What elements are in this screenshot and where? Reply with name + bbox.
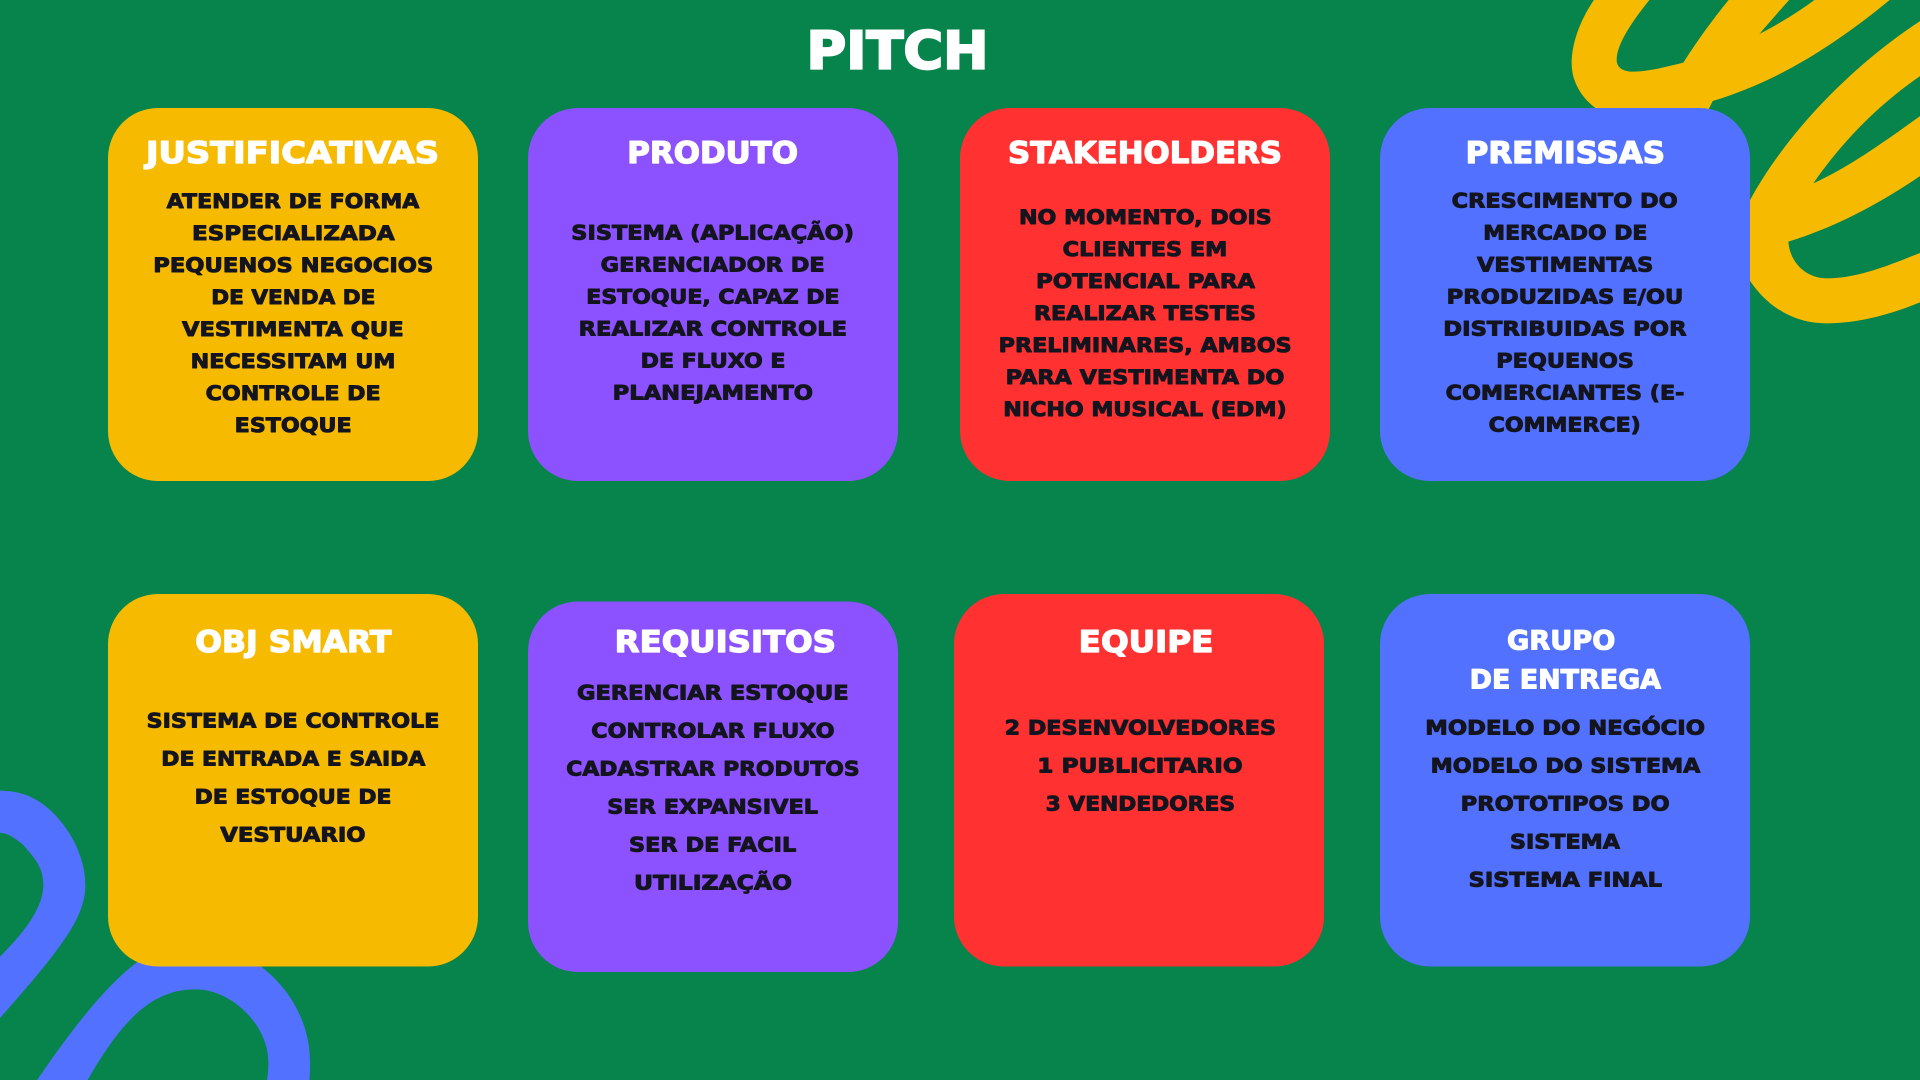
heading: grupo de entrega: GRUPO — [1507, 625, 1615, 656]
text block: premissas — [1443, 189, 1687, 437]
text block: justificativas: ESTOQUE — [235, 413, 352, 437]
heading: justificativas: JUSTIFICATIVAS — [144, 136, 439, 171]
text block: premissas: COMERCIANTES (E- — [1446, 381, 1684, 405]
text block: produto: SISTEMA (APLICAÇÃO) — [571, 220, 854, 244]
text block: justificativas: DE VENDA DE — [211, 285, 375, 309]
decorative yellow scribble, top right — [1572, 0, 1920, 323]
panel: obj smart — [108, 594, 478, 966]
text block: requisitos: SER DE FACIL — [629, 832, 797, 856]
text block: obj smart: VESTUARIO — [220, 823, 366, 847]
panel: grupo de entrega — [1380, 594, 1750, 966]
text block: requisitos: CADASTRAR PRODUTOS — [566, 756, 860, 780]
text block: obj smart: DE ESTOQUE DE — [195, 785, 391, 809]
text block: premissas: PRODUZIDAS E/OU — [1447, 285, 1683, 309]
text block: obj smart — [147, 709, 439, 847]
panel: equipe — [954, 594, 1324, 966]
text block: requisitos: UTILIZAÇÃO — [634, 870, 792, 894]
heading: obj smart: OBJ SMART — [195, 625, 392, 660]
text block: grupo de entrega: SISTEMA FINAL — [1469, 867, 1662, 891]
text block: justificativas: ATENDER DE FORMA — [167, 189, 420, 213]
text block: obj smart: SISTEMA DE CONTROLE — [147, 709, 439, 733]
decorative blue scribble, bottom left — [0, 791, 310, 1080]
text block: requisitos: SER EXPANSIVEL — [607, 794, 818, 818]
text block: stakeholders: PRELIMINARES, AMBOS — [999, 333, 1292, 357]
panel: justificativas — [108, 108, 478, 481]
panel: premissas — [1380, 108, 1750, 481]
text block: equipe: 2 DESENVOLVEDORES — [1005, 715, 1276, 739]
text block: stakeholders: REALIZAR TESTES — [1034, 301, 1256, 325]
text block: produto: PLANEJAMENTO — [613, 380, 813, 404]
heading: equipe: EQUIPE — [1079, 625, 1213, 660]
text block: grupo de entrega: SISTEMA — [1510, 829, 1621, 853]
text block: stakeholders: CLIENTES EM — [1063, 237, 1227, 261]
heading: requisitos: REQUISITOS — [615, 625, 836, 660]
text block: justificativas: PEQUENOS NEGOCIOS — [153, 253, 433, 277]
text block: premissas: VESTIMENTAS — [1477, 253, 1653, 277]
text block: stakeholders: NICHO MUSICAL (EDM) — [1003, 397, 1287, 421]
title: PITCH — [806, 22, 988, 82]
text block: requisitos: CONTROLAR FLUXO — [591, 718, 835, 742]
text block: grupo de entrega — [1425, 715, 1705, 891]
text block: requisitos — [566, 680, 860, 894]
heading: produto: PRODUTO — [627, 136, 798, 171]
text block: equipe: 3 VENDEDORES — [1046, 791, 1235, 815]
text block: justificativas: NECESSITAM UM — [191, 349, 395, 373]
text block: justificativas: VESTIMENTA QUE — [182, 317, 404, 341]
text block: obj smart: DE ENTRADA E SAIDA — [161, 747, 426, 771]
text block: premissas: CRESCIMENTO DO — [1452, 189, 1678, 213]
text block: produto — [571, 220, 854, 404]
panel: produto — [528, 108, 898, 481]
heading: premissas: PREMISSAS — [1466, 136, 1665, 171]
text block: stakeholders: PARA VESTIMENTA DO — [1006, 365, 1284, 389]
heading: grupo de entrega: DE ENTREGA — [1470, 665, 1661, 696]
text block: produto: DE FLUXO E — [641, 348, 785, 372]
text block: stakeholders — [999, 205, 1292, 421]
text block: grupo de entrega: MODELO DO NEGÓCIO — [1425, 715, 1705, 739]
text block: grupo de entrega: PROTOTIPOS DO — [1461, 791, 1670, 815]
text block: equipe — [1005, 715, 1276, 815]
heading: grupo de entrega — [1470, 625, 1661, 696]
text block: stakeholders: NO MOMENTO, DOIS — [1019, 205, 1272, 229]
text block: premissas: PEQUENOS — [1496, 349, 1634, 373]
text block: justificativas — [153, 189, 433, 437]
panel: requisitos — [528, 602, 898, 972]
text block: produto: GERENCIADOR DE — [601, 252, 825, 276]
heading: stakeholders: STAKEHOLDERS — [1008, 136, 1282, 171]
text block: justificativas: ESPECIALIZADA — [192, 221, 395, 245]
panel: stakeholders — [960, 108, 1330, 481]
text block: produto: REALIZAR CONTROLE — [579, 316, 847, 340]
text block: produto: ESTOQUE, CAPAZ DE — [586, 284, 840, 308]
text block: premissas: DISTRIBUIDAS POR — [1443, 317, 1687, 341]
text block: justificativas: CONTROLE DE — [206, 381, 381, 405]
text block: equipe: 1 PUBLICITARIO — [1037, 753, 1243, 777]
text block: premissas: MERCADO DE — [1483, 221, 1647, 245]
text block: grupo de entrega: MODELO DO SISTEMA — [1431, 753, 1701, 777]
text block: requisitos: GERENCIAR ESTOQUE — [577, 680, 849, 704]
text block: premissas: COMMERCE) — [1489, 413, 1641, 437]
text block: stakeholders: POTENCIAL PARA — [1036, 269, 1256, 293]
